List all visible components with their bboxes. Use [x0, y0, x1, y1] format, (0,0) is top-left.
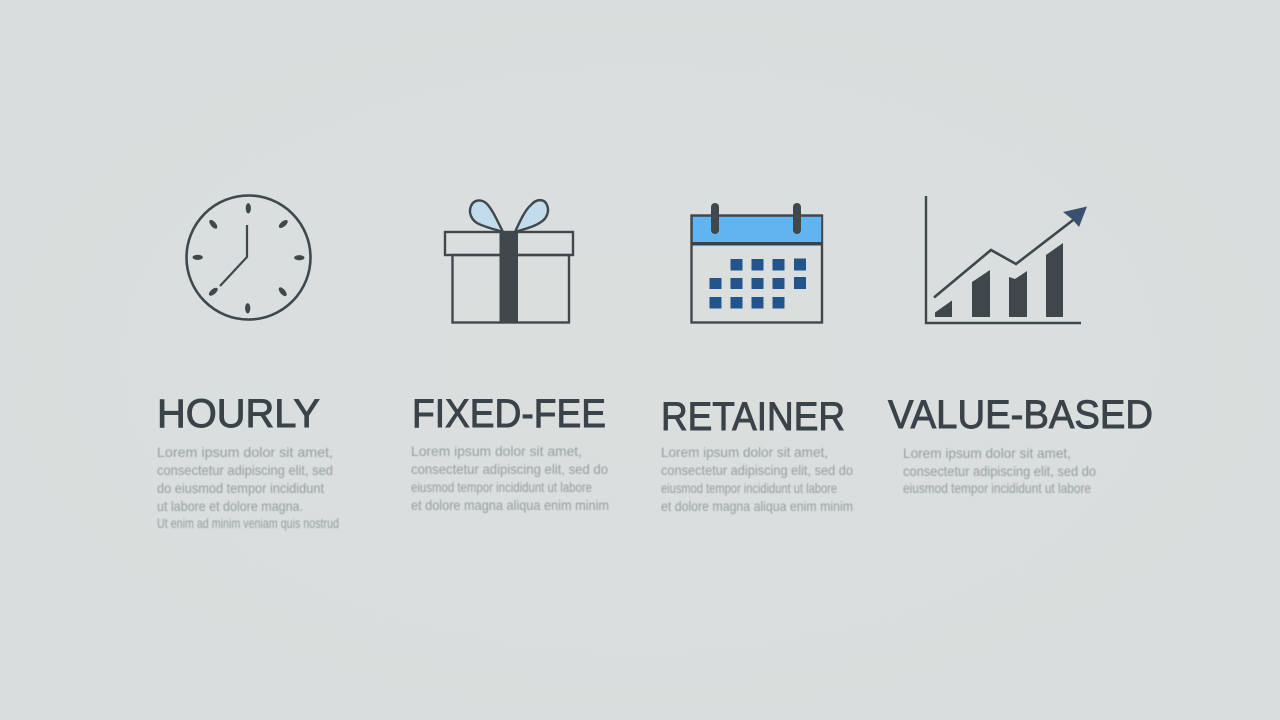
text block: fixed-fee — [411, 443, 609, 513]
heading: value-based: VALUE-BASED — [888, 393, 1153, 437]
text block: hourly: Ut enim ad minim veniam quis nostrud — [157, 515, 339, 531]
icon: clock — [186, 196, 310, 320]
icon: growth chart — [926, 196, 1087, 323]
text block: value-based: consectetur adipiscing elit, sed do — [903, 463, 1096, 479]
text block: retainer — [661, 444, 853, 514]
heading: fixed-fee: FIXED-FEE — [412, 392, 606, 436]
text block: hourly: Lorem ipsum dolor sit amet, — [157, 444, 333, 460]
text block: retainer: et dolore magna aliqua enim minim — [661, 498, 853, 514]
text block: retainer: Lorem ipsum dolor sit amet, — [661, 444, 828, 460]
icon: calendar — [692, 203, 822, 322]
text block: hourly: consectetur adipiscing elit, sed — [157, 462, 333, 478]
text block: hourly — [157, 444, 339, 531]
text block: fixed-fee: eiusmod tempor incididunt ut labore — [411, 479, 592, 495]
icon: gift box — [445, 200, 573, 323]
text block: value-based — [903, 445, 1096, 496]
text block: value-based: Lorem ipsum dolor sit amet, — [903, 445, 1071, 461]
text block: hourly: ut labore et dolore magna. — [157, 498, 303, 514]
text block: hourly: do eiusmod tempor incididunt — [157, 480, 324, 496]
text block: fixed-fee: et dolore magna aliqua enim minim — [411, 497, 609, 513]
text block: fixed-fee: consectetur adipiscing elit, sed do — [411, 461, 608, 477]
text block: value-based: eiusmod tempor incididunt ut labore — [903, 480, 1091, 496]
heading: retainer: RETAINER — [661, 395, 845, 439]
heading: hourly: HOURLY — [157, 392, 320, 436]
text block: retainer: consectetur adipiscing elit, sed do — [661, 462, 853, 478]
text block: retainer: eiusmod tempor incididunt ut labore — [661, 480, 837, 496]
text block: fixed-fee: Lorem ipsum dolor sit amet, — [411, 443, 582, 459]
